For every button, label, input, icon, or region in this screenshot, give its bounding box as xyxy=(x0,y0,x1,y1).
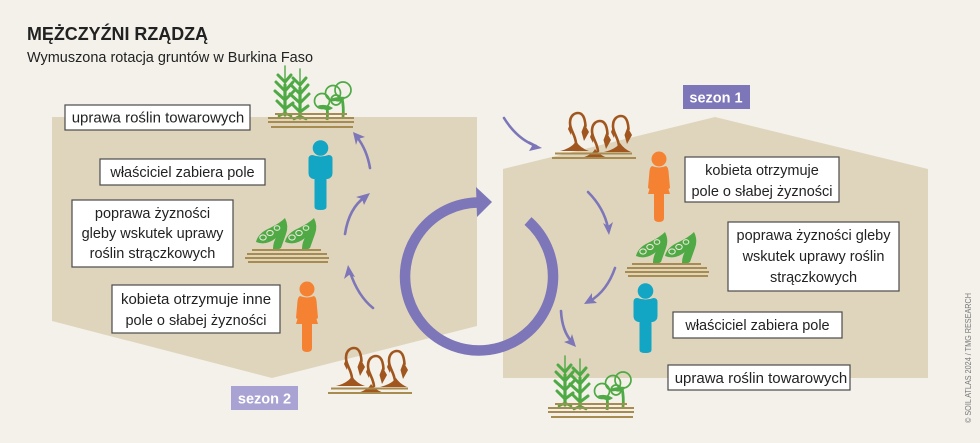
arrow: crops from legumes (left top) xyxy=(353,132,370,168)
label: kobieta otrzymuje inne pole (left) xyxy=(112,285,280,333)
badge: sezon 2 xyxy=(231,386,298,410)
arrow: legumes to owner (right middle) xyxy=(584,268,615,304)
label: uprawa roślin towarowych (right) xyxy=(668,365,850,390)
icon: owner figure (left) xyxy=(308,140,332,210)
icon: wilted plants (left) xyxy=(328,348,412,393)
label: właściciel zabiera pole (right): właściciel zabiera pole xyxy=(684,318,830,334)
label: właściciel zabiera pole (left) xyxy=(100,159,265,185)
label: kobieta otrzymuje pole (right): kobieta otrzymuje xyxy=(705,163,819,179)
central rotation arrow xyxy=(405,187,553,350)
label: uprawa roślin towarowych (right): uprawa roślin towarowych xyxy=(675,370,847,387)
label: uprawa roślin towarowych (left) xyxy=(65,105,250,130)
label: poprawa żyzności (right) xyxy=(728,222,899,291)
arrow: legumes to owner (left middle) xyxy=(345,193,370,234)
icon: wilted plants (right) xyxy=(552,113,636,158)
icon: owner figure (right) xyxy=(634,283,658,353)
label: kobieta otrzymuje pole (right): pole o słabej żyzności xyxy=(691,184,833,200)
icon: woman figure (right) xyxy=(648,152,670,222)
label: poprawa żyzności (left) xyxy=(72,200,233,267)
arrow: season change to wilted plants xyxy=(504,118,542,151)
arrow: owner to crops (right bottom) xyxy=(561,311,576,347)
panel: season 2 field xyxy=(52,117,477,378)
subtitle: Wymuszona rotacja gruntów w Burkina Faso xyxy=(27,50,313,66)
badge: sezon 1: sezon 1 xyxy=(689,90,743,106)
arrow: woman to legumes (left bottom) xyxy=(344,265,373,308)
label: właściciel zabiera pole (right) xyxy=(673,312,842,338)
label: kobieta otrzymuje inne pole (left): pole o słabej żyzności xyxy=(125,313,267,329)
icon: crops (right) xyxy=(548,356,634,417)
label: poprawa żyzności (right): wskutek uprawy roślin xyxy=(742,249,884,265)
label: uprawa roślin towarowych (left): uprawa roślin towarowych xyxy=(72,110,244,126)
label: poprawa żyzności (right): poprawa żyzności gleby xyxy=(737,228,891,244)
label: właściciel zabiera pole (left): właściciel zabiera pole xyxy=(109,165,255,181)
label: poprawa żyzności (left): gleby wskutek uprawy xyxy=(82,226,224,242)
label: poprawa żyzności (left): roślin strączkowych xyxy=(90,246,215,262)
icon: crops (left) xyxy=(268,66,354,127)
title: MĘŻCZYŹNI RZĄDZĄ xyxy=(27,23,208,44)
credit: © SOIL ATLAS 2024 / TMG RESEARCH xyxy=(964,293,973,423)
label: kobieta otrzymuje inne pole (left): kobieta otrzymuje inne xyxy=(121,291,271,308)
icon: legumes (right) xyxy=(625,232,709,276)
badge: sezon 1 xyxy=(683,85,750,109)
label: poprawa żyzności (right): strączkowych xyxy=(770,270,857,286)
arrow: woman to legumes (right top) xyxy=(588,192,613,235)
badge: sezon 2: sezon 2 xyxy=(238,392,291,408)
panel: season 1 field xyxy=(503,117,928,378)
label: poprawa żyzności (left): poprawa żyzności xyxy=(95,206,210,222)
label: kobieta otrzymuje pole (right) xyxy=(685,157,839,202)
icon: woman figure (left) xyxy=(296,282,318,352)
icon: legumes (left) xyxy=(245,218,329,262)
